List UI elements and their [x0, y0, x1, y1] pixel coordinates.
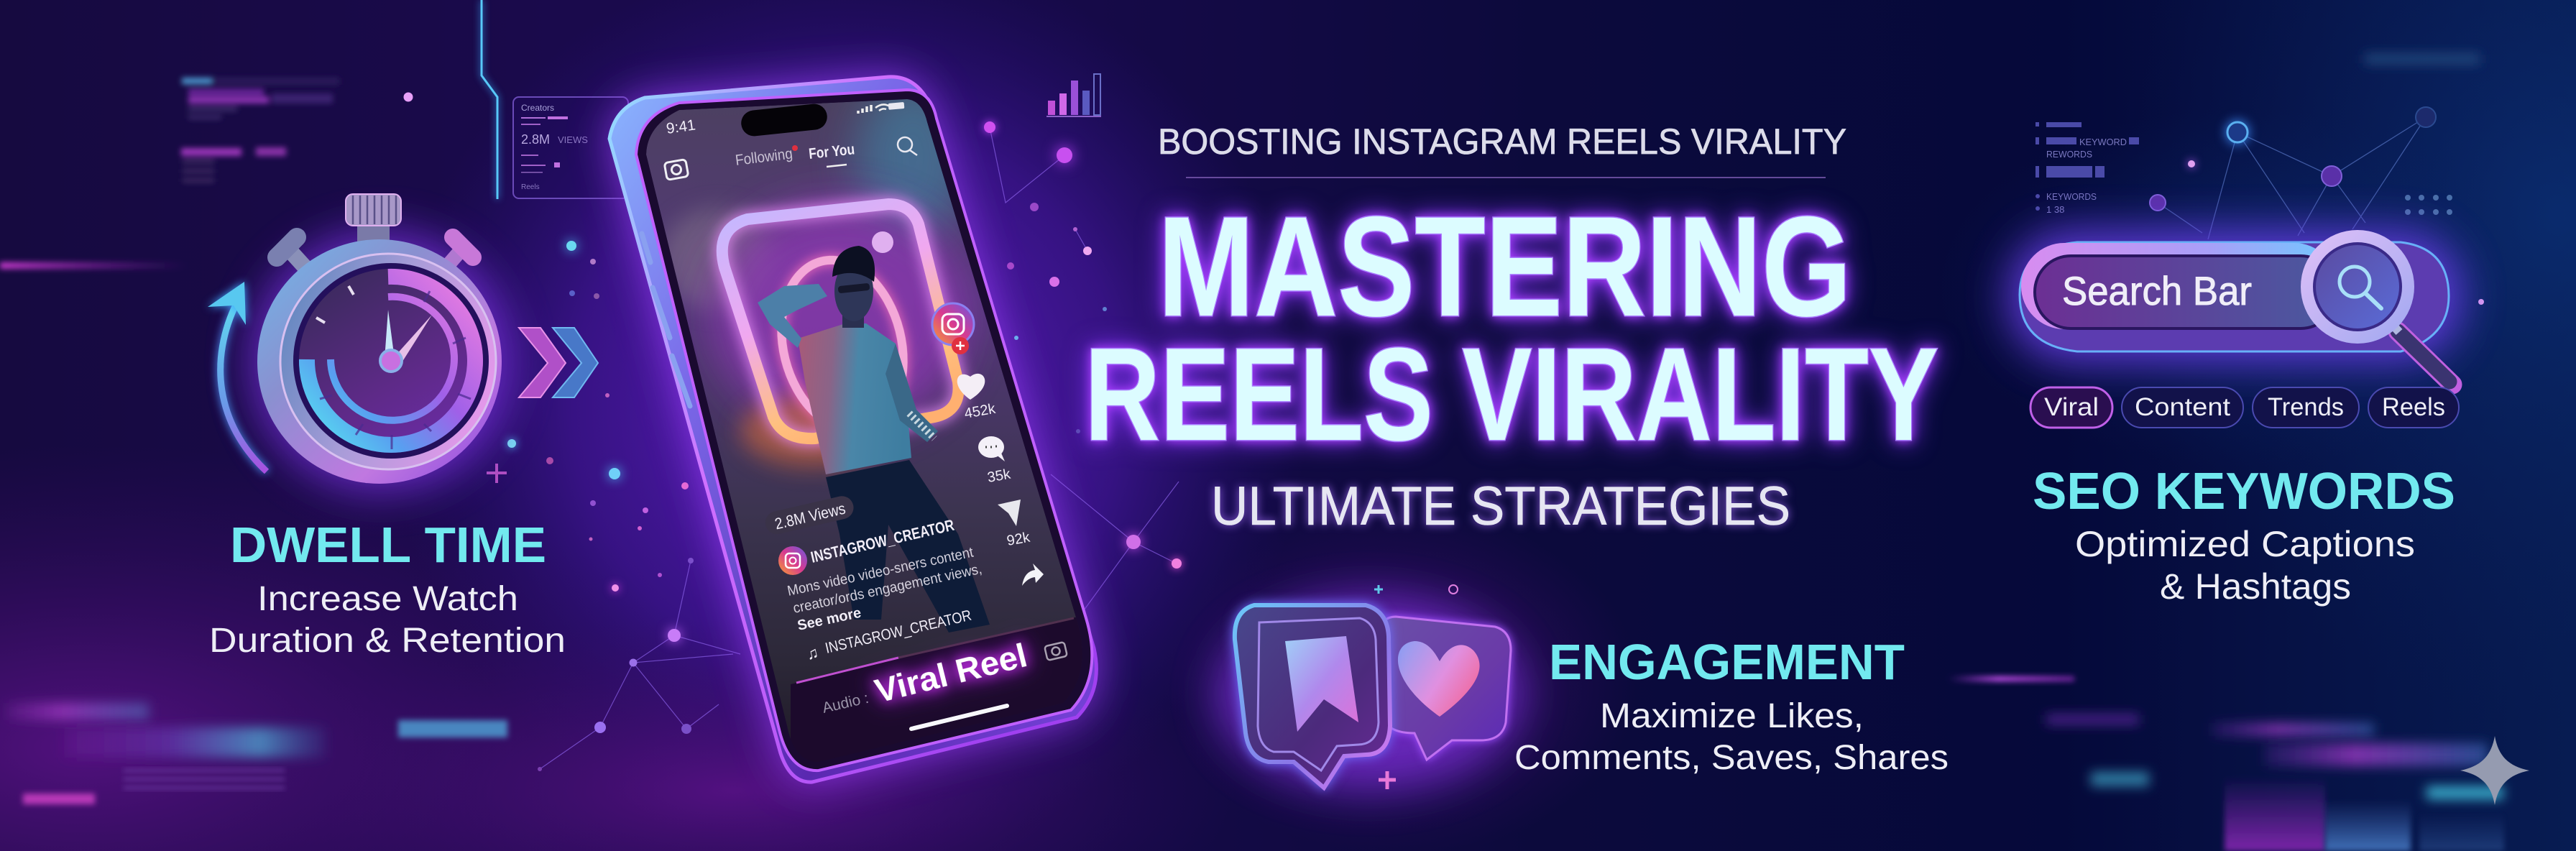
side buttons	[642, 234, 690, 406]
sparkle mark	[2460, 736, 2529, 805]
data card: 2.8M	[521, 132, 550, 147]
trousers	[826, 460, 990, 632]
text: dwell time: Duration & Retention	[209, 622, 566, 660]
text: dwell time	[209, 517, 566, 660]
keyword mini panel: 1 38	[2046, 204, 2064, 215]
viral reel label: Viral Reel	[871, 636, 1031, 710]
description: Increase Watch	[257, 580, 518, 618]
case	[257, 239, 502, 484]
bar shell	[2020, 242, 2449, 351]
caption: See more	[796, 605, 862, 634]
keyword pills	[2030, 387, 2459, 428]
creator avatar	[778, 546, 807, 575]
raised arm	[758, 284, 827, 348]
caption: Mons video video-sners content	[786, 544, 975, 599]
instagram inner ring	[769, 247, 916, 427]
input field	[2035, 256, 2337, 328]
data card: Creators	[521, 103, 554, 113]
heart bubble	[1380, 617, 1511, 760]
network and particles: right of phone	[984, 121, 1182, 618]
pill: trends: Trends	[2268, 393, 2344, 421]
instagram follow badge	[932, 303, 974, 354]
phone	[610, 77, 1100, 791]
icon: camera	[664, 160, 689, 180]
icon: camera small	[1044, 642, 1067, 661]
icon: share arrow	[1022, 564, 1044, 586]
phone glow	[610, 77, 1096, 782]
text: engagement: Comments, Saves, Shares	[1514, 739, 1949, 777]
neck and head	[842, 315, 864, 328]
search bar	[2009, 230, 2462, 385]
progress arcs	[307, 277, 475, 445]
top tabs: For You	[808, 141, 855, 162]
home bar	[911, 706, 1007, 729]
data card: VIEWS	[558, 134, 588, 145]
description: Maximize Likes,	[1600, 697, 1864, 735]
text: seo keywords	[2033, 463, 2455, 607]
engagement icons	[1215, 585, 1524, 791]
mini bar chart icon	[1046, 74, 1101, 117]
keyword mini panel: REWORDS	[2046, 149, 2092, 160]
creator name: INSTAGROW_CREATOR	[809, 516, 956, 566]
description: Optimized Captions	[2075, 524, 2415, 564]
icon: search	[898, 137, 917, 155]
overline: BOOSTING INSTAGRAM REELS VIRALITY	[1158, 121, 1846, 162]
data card: Reels	[521, 183, 540, 191]
status bar: 9:41	[665, 116, 696, 137]
glow	[2009, 231, 2462, 361]
rising arrow	[208, 282, 267, 472]
top tabs	[735, 141, 855, 169]
text: seo keywords: & Hashtags	[2160, 566, 2351, 607]
status bar	[665, 102, 904, 137]
subtitle: ULTIMATE STRATEGIES	[1211, 476, 1790, 537]
main title: MASTERING	[1158, 187, 1852, 346]
dial face	[299, 269, 483, 453]
network and particles: left of phone	[404, 92, 740, 771]
instagram outline ring	[722, 204, 959, 438]
shirt	[798, 323, 911, 474]
heading: DWELL TIME	[230, 517, 546, 573]
bookmark bubble	[1235, 605, 1390, 788]
heading: SEO KEYWORDS	[2033, 463, 2455, 520]
top tabs: Following	[735, 145, 794, 169]
pill: viral	[2030, 387, 2112, 428]
bottom tray	[791, 617, 1082, 762]
stopwatch icon	[250, 194, 512, 492]
shares count: 92k	[1006, 529, 1032, 549]
pill: content	[2122, 387, 2243, 428]
audio row: ♫	[805, 643, 820, 663]
notch	[740, 103, 829, 137]
hands	[385, 310, 395, 359]
audio row: INSTAGROW_CREATOR	[824, 607, 973, 657]
keyword mini panel: KEYWORDS	[2046, 191, 2097, 202]
glow	[1215, 597, 1524, 791]
person	[758, 246, 990, 632]
keyword mini panel: KEYWORD	[2079, 137, 2127, 147]
pill: reels: Reels	[2382, 393, 2445, 421]
plus	[1379, 771, 1396, 789]
audio row	[805, 607, 973, 663]
audio label: Audio :	[821, 690, 870, 717]
glow	[250, 231, 512, 492]
heading: ENGAGEMENT	[1549, 634, 1905, 690]
views pill: 2.8M Views	[773, 500, 847, 533]
pill: viral: Viral	[2044, 393, 2099, 421]
caption	[786, 544, 983, 634]
comments count: 35k	[986, 466, 1013, 486]
main title	[1085, 187, 1938, 468]
icon: paper plane	[998, 500, 1021, 526]
chevron arrows	[519, 328, 598, 397]
likes count: 452k	[963, 401, 998, 422]
caption: creator/ords engagement views,	[791, 561, 983, 617]
icon: like heart	[957, 374, 985, 400]
pill: reels	[2368, 387, 2459, 428]
magnifier	[2301, 230, 2452, 385]
front bezel	[636, 90, 1092, 770]
keyword mini panel	[2036, 122, 2139, 215]
blurred data panel top left	[181, 78, 339, 183]
screen	[646, 99, 1076, 738]
cyan circuit line	[482, 0, 497, 199]
side buttons	[277, 237, 473, 272]
icon: comment bubble	[978, 436, 1005, 461]
search text: Search Bar	[2062, 268, 2252, 313]
keyword network	[2150, 107, 2484, 305]
pill: trends	[2253, 387, 2359, 428]
sparkles	[1374, 585, 1383, 594]
divider	[1186, 177, 1826, 178]
main title: REELS VIRALITY	[1085, 320, 1938, 468]
crown	[346, 194, 401, 244]
dot grid	[2405, 195, 2452, 215]
pill: content: Content	[2135, 393, 2230, 421]
lower arm	[886, 344, 938, 442]
phone body	[610, 77, 1096, 782]
data card	[513, 97, 628, 198]
ticks	[316, 286, 354, 323]
text: engagement	[1514, 634, 1949, 777]
